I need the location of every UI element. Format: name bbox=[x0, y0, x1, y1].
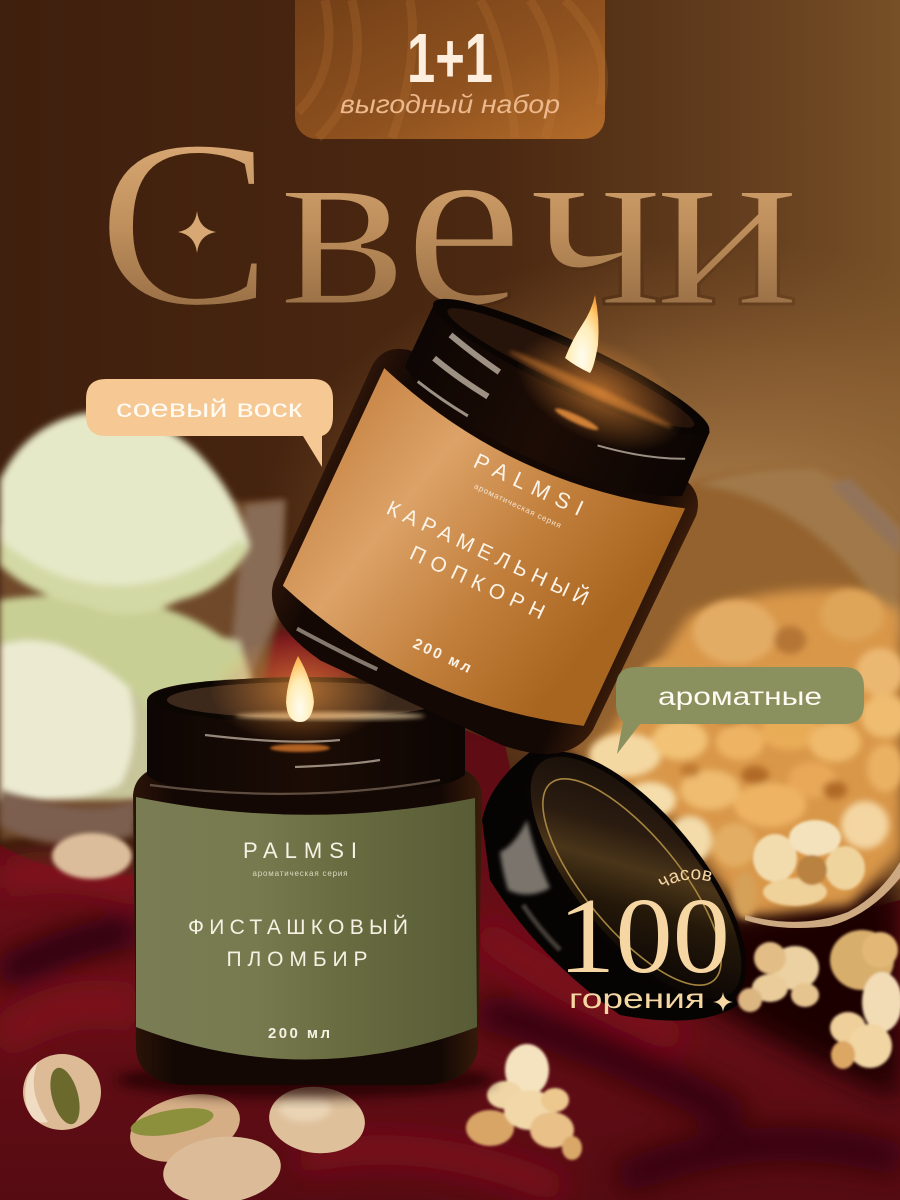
stat: 100 hours: 100 bbox=[558, 877, 730, 996]
callout: aromatic bbox=[616, 667, 864, 754]
icon: sparkle bbox=[178, 211, 216, 253]
flame bbox=[565, 295, 599, 373]
paper edge bbox=[745, 862, 900, 928]
label: caramel: ПОПКОРН bbox=[406, 542, 548, 624]
label: pistachio: PALMSI bbox=[243, 838, 357, 863]
label: caramel: PALMSI bbox=[470, 448, 587, 521]
badge: 1+1 bbox=[295, 0, 605, 139]
cloth bbox=[0, 730, 900, 1200]
label: caramel: 200 мл bbox=[410, 635, 474, 677]
flame bbox=[286, 656, 314, 722]
label: pistachio: ФИСТАШКОВЫЙ bbox=[188, 915, 408, 939]
title: Свечи bbox=[97, 86, 800, 357]
stat: 100 hours: часов bbox=[658, 869, 712, 886]
label: pistachio: ПЛОМБИР bbox=[226, 948, 368, 971]
stat: 100 hours: горения bbox=[569, 983, 705, 1014]
label: caramel bbox=[271, 368, 685, 750]
bottom scoop bbox=[0, 640, 134, 801]
label: caramel: ароматическая серия bbox=[473, 482, 562, 530]
badge: 1+1: выгодный набор bbox=[340, 89, 560, 119]
badge: 1+1: 1+1 bbox=[407, 19, 493, 97]
loose popcorn bbox=[738, 930, 900, 1069]
popcorn pile bbox=[589, 589, 900, 1069]
callout: soy wax: соевый воск bbox=[116, 395, 303, 423]
icon: small sparkle bbox=[713, 992, 733, 1012]
paper bag bbox=[560, 467, 900, 930]
black lid bbox=[482, 721, 781, 1035]
label: pistachio bbox=[136, 797, 477, 1060]
middle scoop bbox=[0, 595, 245, 712]
backing of scoops bbox=[0, 600, 255, 800]
green jar bbox=[115, 635, 495, 1098]
label: pistachio: 200 мл bbox=[268, 1025, 330, 1042]
callout: aromatic: ароматные bbox=[658, 683, 822, 711]
label: caramel: КАРАМЕЛЬНЫЙ bbox=[383, 496, 593, 611]
orange jar bbox=[250, 254, 748, 779]
top scoop bbox=[0, 413, 250, 614]
pistachios bbox=[23, 833, 368, 1200]
ice cream in glass bowl bbox=[0, 413, 285, 845]
label: pistachio: ароматическая серия bbox=[252, 869, 348, 878]
foreground popcorn bbox=[466, 1044, 582, 1160]
callout: soy wax bbox=[86, 379, 333, 467]
